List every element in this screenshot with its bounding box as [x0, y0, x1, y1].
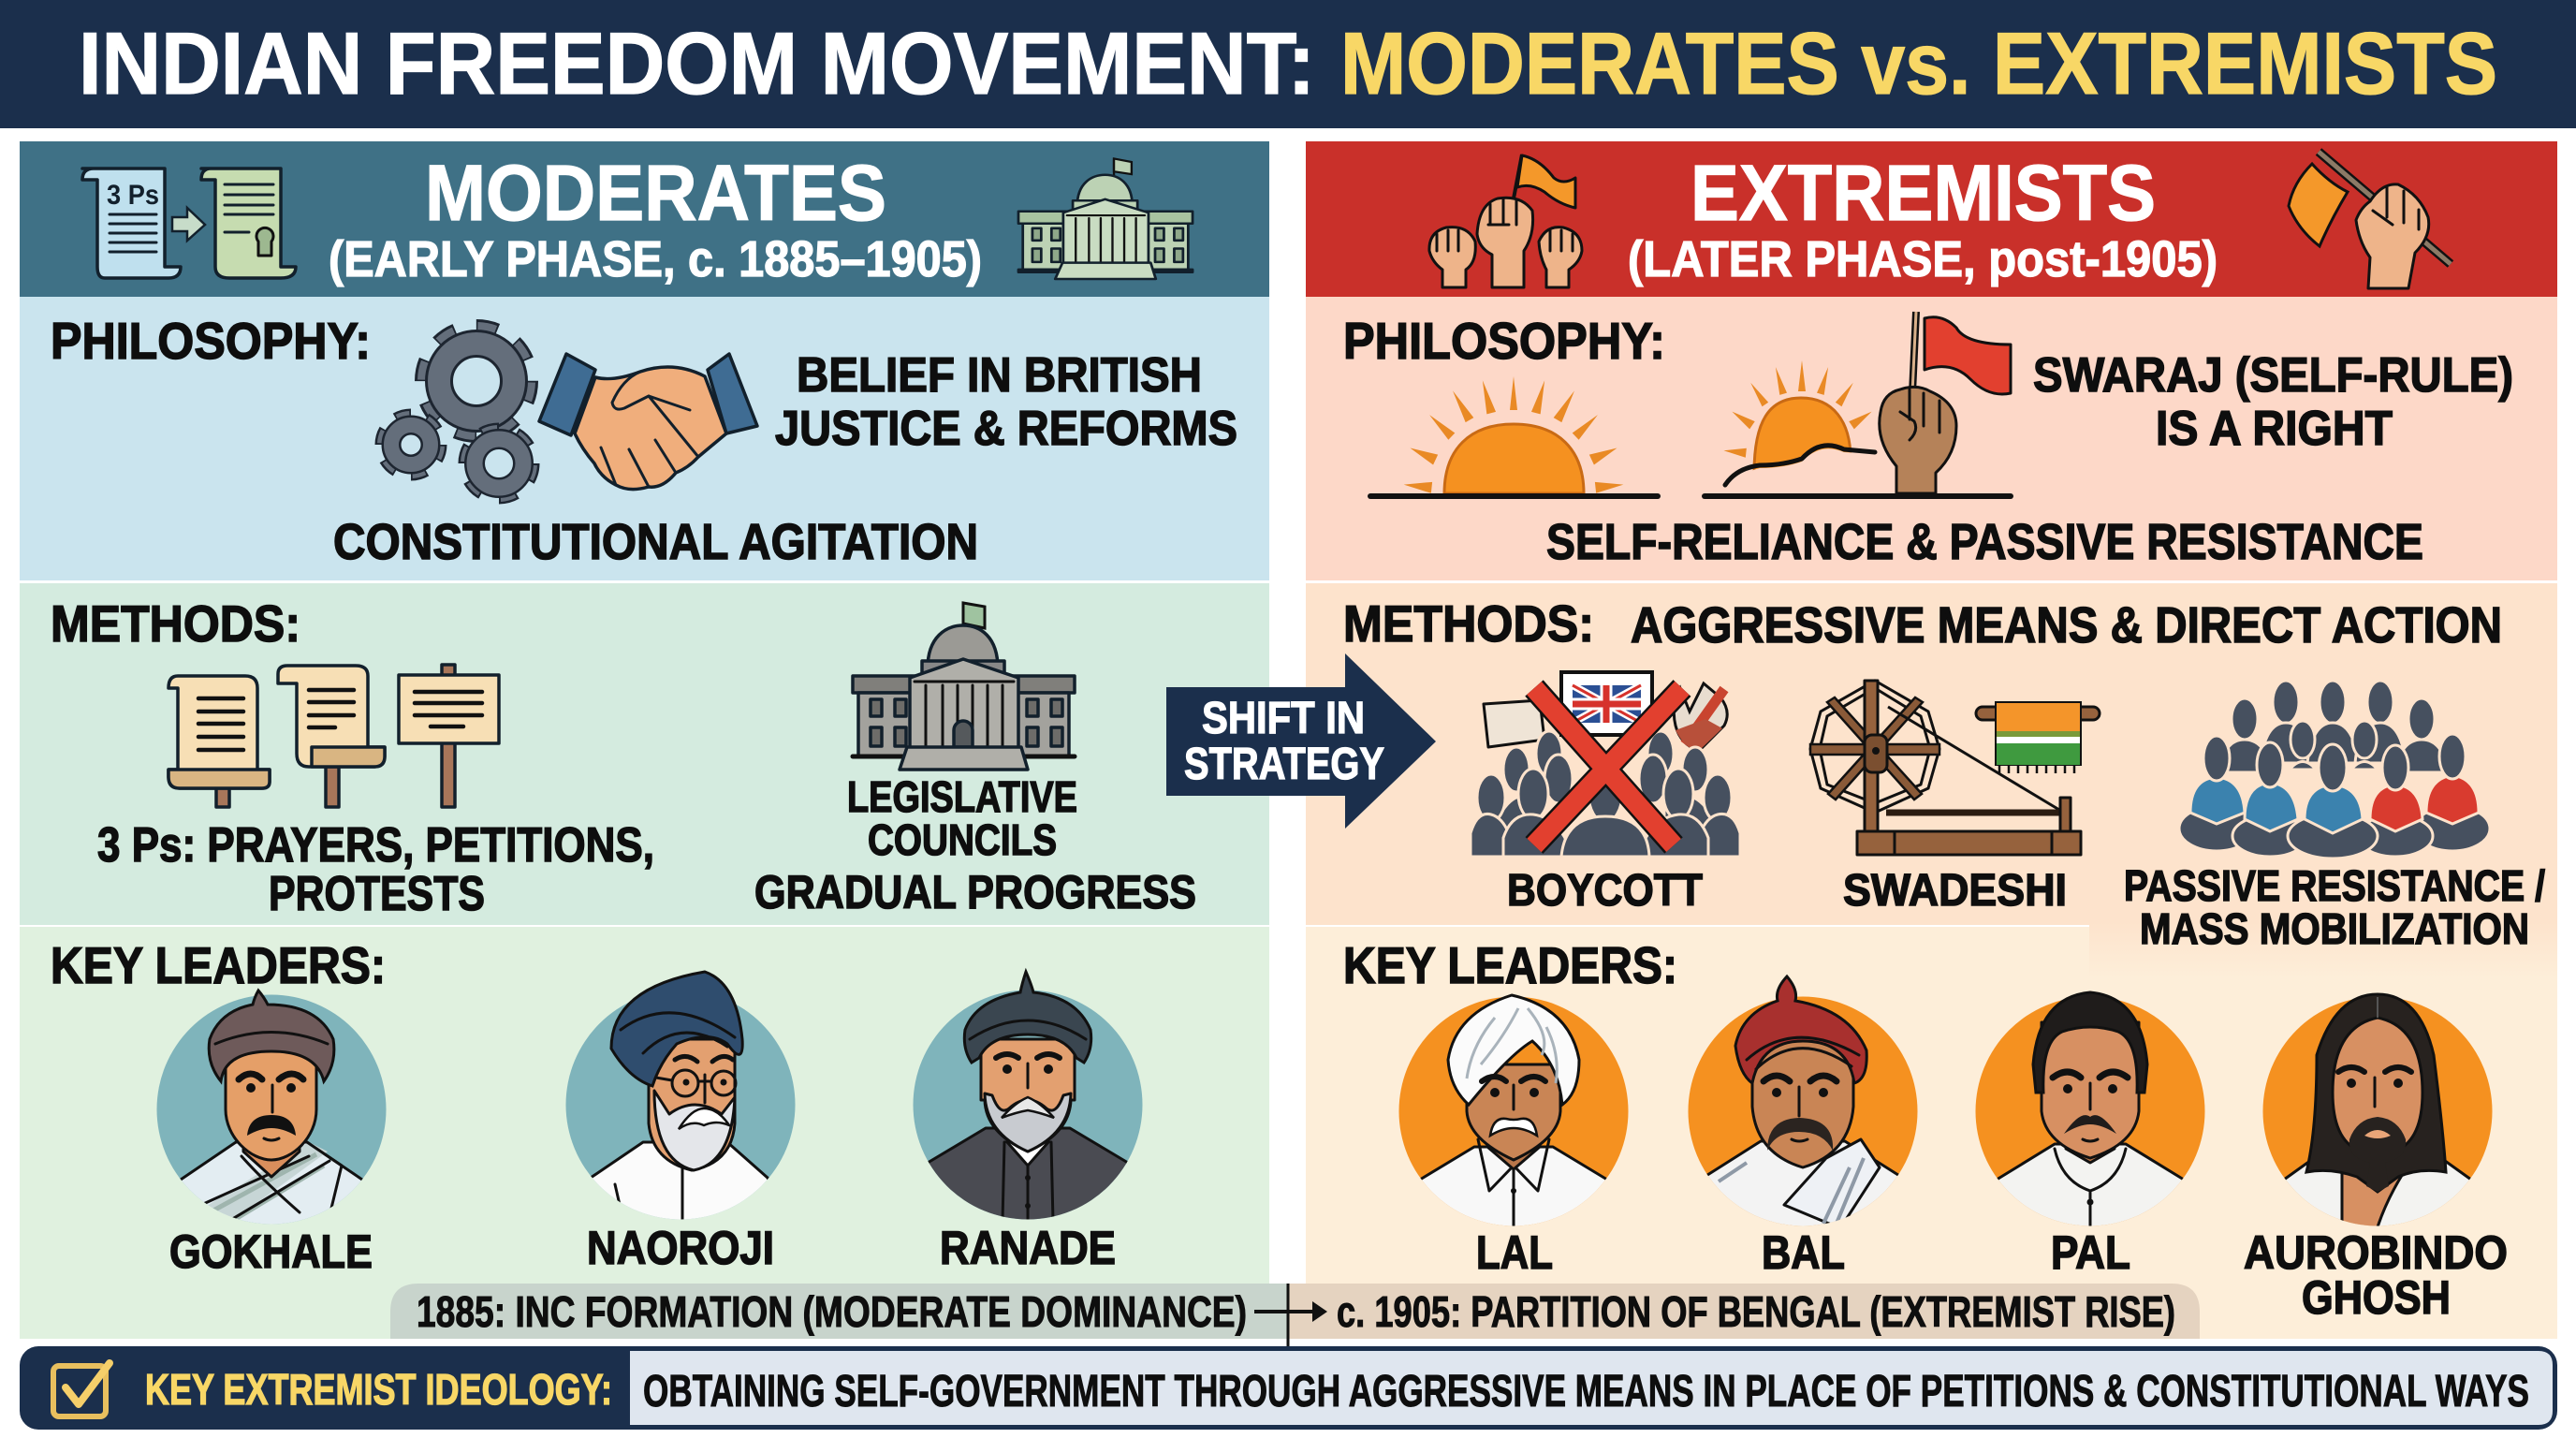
heading: philosophy: PHILOSOPHY:	[51, 312, 371, 370]
icon: scrolls 3 Ps	[82, 169, 296, 278]
text: swaraj is a right: SWARAJ (SELF-RULE)	[2033, 348, 2513, 403]
text: legislative councils: COUNCILS	[868, 815, 1057, 864]
panel: extremists column	[1288, 141, 2557, 1339]
label: Ranade: RANADE	[940, 1222, 1116, 1274]
text: passive resistance / mass mobilization	[2124, 861, 2545, 953]
timeline segment: 1905	[1288, 1284, 2200, 1339]
timeline segment: 1905: c. 1905: PARTITION OF BENGAL (EXTREMIST RISE)	[1337, 1287, 2175, 1336]
text: self-reliance and passive resistance: SELF-RELIANCE & PASSIVE RESISTANCE	[1546, 514, 2423, 570]
text: swaraj is a right: IS A RIGHT	[2156, 402, 2393, 456]
panel: moderates column	[20, 141, 1288, 1339]
panel header: extremists	[1306, 141, 2557, 297]
panel: extremists methods	[1306, 583, 2557, 925]
title: main heading: INDIAN FREEDOM MOVEMENT:	[79, 14, 1315, 112]
label: Naoroji: NAOROJI	[587, 1222, 774, 1274]
panel: moderates methods	[20, 583, 1269, 925]
portrait: Pal	[1975, 992, 2205, 1233]
icon: parliament building	[1018, 158, 1193, 279]
text: belief in british justice and reforms: JUSTICE & REFORMS	[775, 402, 1237, 456]
label: Pal: PAL	[2051, 1226, 2130, 1279]
icon: prayers petitions protests scrolls	[168, 665, 499, 807]
label: key extremist ideology: KEY EXTREMIST IDEOLOGY:	[145, 1365, 612, 1414]
icon: seated crowd	[2179, 681, 2490, 858]
icon: rising sun	[1370, 376, 1658, 496]
text: swaraj is a right	[2033, 348, 2513, 456]
icon: handshake	[539, 354, 757, 490]
panel header: moderates	[20, 141, 1269, 297]
heading: key leaders: KEY LEADERS:	[51, 936, 386, 994]
subheading: later phase: (LATER PHASE, post-1905)	[1628, 231, 2217, 287]
heading: methods: METHODS:	[51, 594, 300, 653]
icon: checkbox	[53, 1363, 110, 1416]
portrait: Lal	[1398, 995, 1629, 1233]
text: 3 Ps	[97, 818, 654, 921]
label: Lal: LAL	[1476, 1226, 1553, 1279]
icon: boycott	[1471, 672, 1740, 857]
label: Aurobindo Ghosh	[2244, 1226, 2508, 1324]
arrow: shift in strategy: SHIFT IN	[1202, 694, 1365, 743]
icon: charkha and cloth	[1810, 681, 2100, 855]
heading: moderates: MODERATES	[425, 149, 886, 237]
label: swadeshi: SWADESHI	[1843, 866, 2067, 916]
portrait: Gokhale	[157, 990, 386, 1231]
key ideology bar	[20, 1346, 2557, 1430]
label: Gokhale: GOKHALE	[169, 1225, 373, 1278]
portrait: Bal	[1689, 976, 1917, 1233]
icon: sun with raised fist and flag	[1705, 312, 2011, 496]
icon: gears	[382, 330, 533, 497]
panel: moderates key leaders	[20, 927, 1288, 1339]
panel: moderates philosophy	[20, 297, 1269, 580]
text: 3 Ps: 3 Ps: PRAYERS, PETITIONS,	[97, 818, 654, 873]
heading: methods: METHODS:	[1343, 594, 1594, 653]
icon: scrolls 3 Ps: 3 Ps	[107, 180, 159, 211]
ideology statement box	[630, 1351, 2553, 1425]
icon: raised fists with flag	[1429, 154, 1582, 287]
arrow: shift in strategy: STRATEGY	[1184, 740, 1384, 789]
portrait: Ranade	[914, 972, 1142, 1226]
text: 3 Ps: PROTESTS	[269, 867, 485, 921]
label: Aurobindo Ghosh: AUROBINDO	[2244, 1226, 2508, 1279]
panel: extremists philosophy	[1306, 297, 2557, 580]
icon: legislative building	[853, 603, 1075, 770]
text: legislative councils	[847, 772, 1077, 864]
portrait: Naoroji	[565, 972, 796, 1226]
text: passive resistance / mass mobilization: MASS MOBILIZATION	[2140, 904, 2529, 953]
text: constitutional agitation: CONSTITUTIONAL AGITATION	[333, 514, 978, 570]
icon: hand holding flag	[2289, 152, 2451, 288]
heading: key leaders: KEY LEADERS:	[1343, 936, 1677, 994]
label: Bal: BAL	[1762, 1226, 1845, 1279]
subheading: early phase: (EARLY PHASE, c. 1885–1905)	[329, 231, 982, 287]
heading: philosophy: PHILOSOPHY:	[1343, 312, 1665, 370]
text: gradual progress: GRADUAL PROGRESS	[754, 866, 1196, 918]
portrait: Aurobindo Ghosh	[2263, 994, 2492, 1233]
arrow: shift in strategy	[1166, 653, 1436, 829]
text: legislative councils: LEGISLATIVE	[847, 772, 1077, 821]
title bar	[0, 0, 2576, 128]
timeline connector arrow	[1254, 1284, 1327, 1346]
heading: extremists: EXTREMISTS	[1690, 149, 2156, 237]
timeline segment: 1885: 1885: INC FORMATION (MODERATE DOMINANCE)	[417, 1287, 1247, 1336]
label: Aurobindo Ghosh: GHOSH	[2302, 1271, 2451, 1324]
panel: extremists key leaders	[1288, 861, 2557, 1339]
text: belief in british justice and reforms	[775, 348, 1237, 456]
label: boycott: BOYCOTT	[1507, 866, 1703, 916]
text: belief in british justice and reforms: BELIEF IN BRITISH	[797, 348, 1202, 403]
icon: union jack flag	[1573, 685, 1641, 723]
